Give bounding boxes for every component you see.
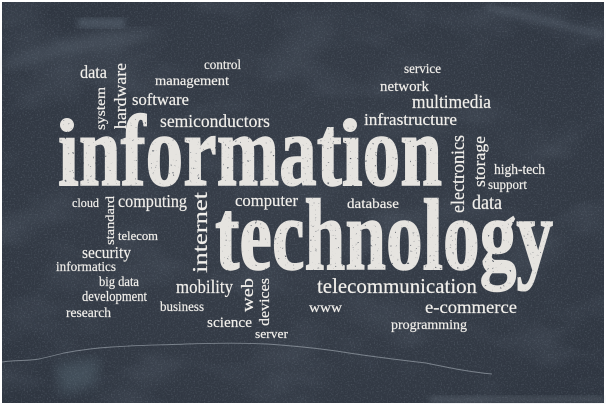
- word cloud: horizontal words: data: [472, 192, 502, 214]
- word cloud: horizontal words: data: [80, 62, 107, 82]
- word cloud: horizontal words: software: [132, 90, 189, 109]
- word cloud: horizontal words: multimedia: [412, 92, 492, 113]
- word cloud: horizontal words: computing: [118, 191, 187, 211]
- word cloud: horizontal words: management: [155, 74, 229, 89]
- word cloud: horizontal words: telecommunication: [317, 274, 477, 298]
- heading: information: [59, 112, 442, 187]
- word cloud: horizontal words: infrastructure: [364, 110, 457, 129]
- word cloud: vertical words: storage: [470, 136, 489, 187]
- word cloud: vertical words: devices: [257, 278, 273, 326]
- word cloud: horizontal words: e-commerce: [425, 297, 517, 317]
- word cloud: horizontal words: www: [309, 301, 343, 316]
- word cloud: horizontal words: computer: [235, 191, 298, 210]
- word cloud: horizontal words: control: [204, 58, 241, 73]
- word cloud: horizontal words: programming: [391, 318, 467, 333]
- word cloud: horizontal words: server: [255, 326, 289, 341]
- word cloud: horizontal words: telecom: [118, 228, 158, 243]
- word cloud: horizontal words: service: [404, 62, 441, 77]
- word cloud: horizontal words: big data: [99, 275, 140, 290]
- word cloud: horizontal words: network: [380, 79, 429, 95]
- word cloud: vertical words: standard: [102, 195, 117, 245]
- word cloud: vertical words: web: [238, 278, 257, 312]
- word cloud: horizontal words: science: [207, 315, 252, 331]
- word cloud: horizontal words: high-tech: [494, 162, 545, 178]
- word cloud: horizontal words: database: [347, 197, 399, 212]
- word cloud: horizontal words: cloud: [72, 195, 99, 210]
- word cloud: horizontal words: semiconductors: [160, 111, 270, 131]
- heading: information: information: [58, 95, 442, 208]
- word cloud: vertical words: hardware: [111, 63, 130, 129]
- word cloud: horizontal words: [56, 58, 545, 341]
- word cloud: horizontal words: informatics: [56, 260, 116, 275]
- word cloud: horizontal words: support: [488, 178, 527, 193]
- word cloud: vertical words: system: [94, 87, 109, 130]
- chalk scratch line: [2, 343, 492, 374]
- word cloud: horizontal words: security: [82, 243, 131, 262]
- word cloud: horizontal words: business: [160, 300, 204, 315]
- word cloud: horizontal words: mobility: [176, 277, 233, 298]
- word cloud: vertical words: electronics: [448, 135, 469, 213]
- word cloud: horizontal words: development: [82, 289, 148, 305]
- word cloud: vertical words: [94, 63, 489, 326]
- word cloud: horizontal words: research: [66, 306, 111, 321]
- word cloud: vertical words: internet: [188, 192, 212, 273]
